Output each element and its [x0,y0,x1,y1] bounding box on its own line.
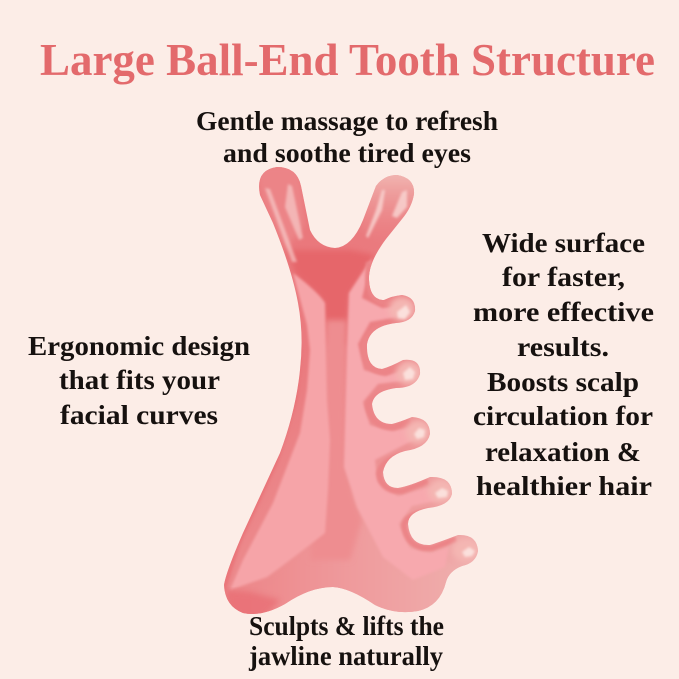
callout: jawline: Sculpts & lifts the [249,611,444,641]
title: Large Ball-End Tooth Structure [40,35,655,85]
notch rims [364,262,456,548]
left prong tone [259,167,304,242]
callout: eyes: and soothe tired eyes [223,138,471,168]
lower jaw tone [224,564,469,614]
left edge shade [224,350,302,592]
right light panel [344,258,449,580]
callout: wide surface and scalp circulation: Wide surface [482,228,645,258]
callout: wide surface and scalp circulation: healthier hair [476,471,652,501]
left light panel [230,273,330,590]
callout: wide surface and scalp circulation: Boosts scalp [487,367,639,397]
callout: ergonomic design: Ergonomic design [28,331,250,361]
callout: wide surface and scalp circulation [473,228,654,501]
tooth tip highlights [397,305,475,557]
callout: wide surface and scalp circulation: relaxation & [485,437,641,467]
gua sha comb tool [215,160,485,625]
callout: eyes: Gentle massage to refresh [196,106,498,136]
tool base [215,160,485,620]
callout: wide surface and scalp circulation: results. [517,332,609,362]
callout: wide surface and scalp circulation: for faster, [502,262,625,292]
central band [318,318,361,559]
callout: jawline: jawline naturally [248,641,443,671]
central neck deep tone [292,248,375,322]
callout: ergonomic design: facial curves [60,400,218,430]
callout: eyes [196,106,498,168]
right prong pale tip [363,175,414,226]
callout: jawline [248,611,444,671]
prong highlights [265,184,407,262]
callout: ergonomic design: that fits your [59,365,220,395]
chin deep tone [226,588,278,614]
callout: wide surface and scalp circulation: circulation for [473,401,653,431]
callout: wide surface and scalp circulation: more effective [473,297,654,327]
callout: ergonomic design [28,331,250,430]
tooth tip washes [389,297,480,562]
